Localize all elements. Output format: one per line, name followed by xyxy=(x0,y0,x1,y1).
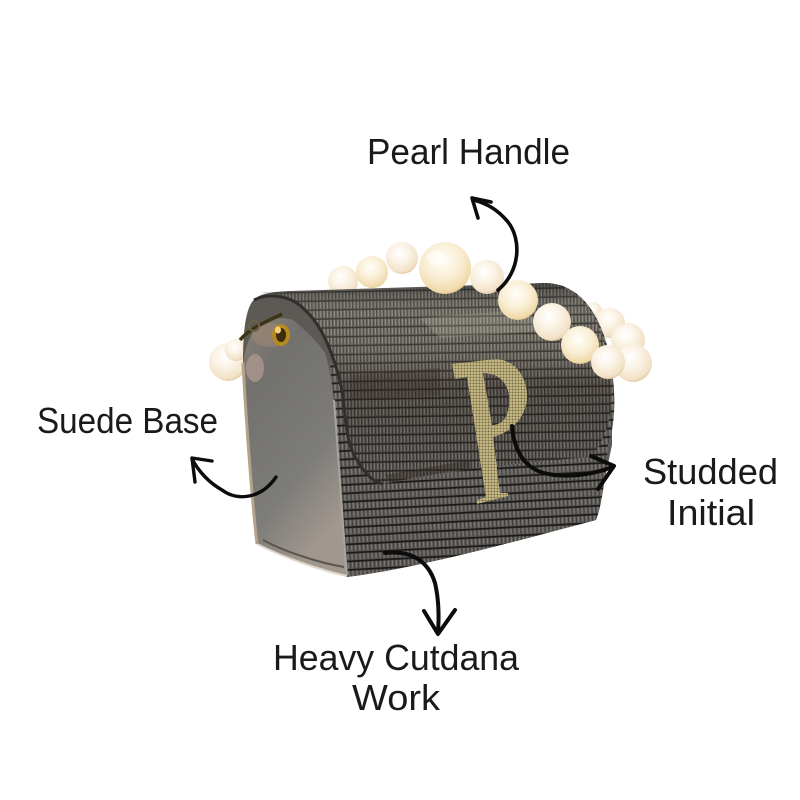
label: Studded Initial: Initial xyxy=(667,492,755,533)
label: Suede Base: Suede Base xyxy=(37,400,218,441)
suede side panel xyxy=(243,318,347,576)
label: Studded Initial xyxy=(643,451,778,533)
front beaded body xyxy=(330,283,614,577)
label: Heavy Cutdana Work: Work xyxy=(352,677,441,718)
handbag body xyxy=(240,283,614,577)
flap xyxy=(254,283,612,484)
title: Pearl Handle label: Pearl Handle xyxy=(367,131,570,172)
metal hardware xyxy=(240,314,290,346)
arrow: to suede base xyxy=(192,458,276,497)
label: Studded Initial: Studded xyxy=(643,451,778,492)
studded initial P xyxy=(452,359,527,504)
arrow: to cutdana work xyxy=(385,552,455,634)
back pearls of handle xyxy=(209,242,652,382)
arrow: to studded initial xyxy=(512,426,614,489)
arrow: to pearl handle xyxy=(472,198,517,290)
silhouette under-layer xyxy=(243,283,612,577)
front pearls of handle xyxy=(419,242,625,379)
label: Heavy Cutdana Work: Heavy Cutdana xyxy=(273,637,520,678)
label: Heavy Cutdana Work xyxy=(273,637,520,718)
